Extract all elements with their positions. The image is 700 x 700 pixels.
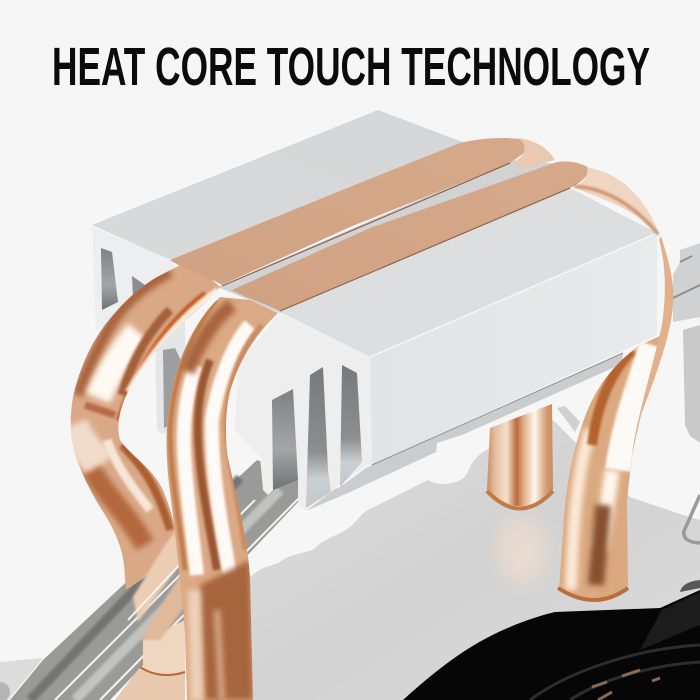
fan copper reflections [592,670,660,700]
rear pipe light edge [128,290,218,392]
front slot 3 [340,365,362,487]
rear pipe far bend [512,138,555,168]
rear fin slot 2 [132,276,145,298]
copper flat contacts [170,138,588,311]
far tube white reflection [618,345,652,470]
front pipe shoulder [188,305,232,372]
front flat contact [232,161,588,311]
rear pipe lower reflection [140,572,184,640]
rear fin slot 1 [101,248,118,310]
front lower fin strip [306,353,623,511]
rear pipe right dark [122,445,170,530]
far tube dark patch [596,505,603,585]
rear pipe clipped shading [72,272,218,545]
rear pipe dark stripe [122,310,170,395]
far tube highlight [571,430,590,590]
front heat sink [235,188,657,511]
rear pipe brown band [92,470,145,545]
stub collar [487,491,553,508]
rear pipe curve [71,260,220,590]
fan edge sheen [640,592,700,650]
far tube streak [592,350,632,445]
front pipe lower light [194,590,197,700]
rear pipe shoulder [78,272,170,395]
rear lower fin [155,320,185,434]
front pipe left edge [170,300,216,570]
front pipe lower mid light [217,610,222,700]
rear lower slot [163,348,183,428]
rear pipe main highlight [98,332,138,398]
fan [403,590,700,700]
far tube collar [558,588,628,600]
plate reflection under stub [496,516,548,584]
rear pipe orange streak [118,293,205,420]
far tube clipped shading [571,345,652,590]
front pipe clipped shading [170,300,262,700]
rear heat sink [92,110,570,434]
front pipe body [167,297,278,700]
fan shroud [403,590,700,700]
far bend top [575,167,660,237]
rear pipe reflection on rods [133,528,183,622]
rear copper stub [487,404,553,508]
front pipe inner edge [226,325,262,550]
rear copper foot [115,620,185,700]
fan hub rings [530,645,700,700]
rear end face [92,227,190,330]
rods, diagonal bracket [0,460,300,700]
rear pipe pale band [107,440,150,510]
gap between pipes [218,160,570,313]
front pipe left highlight [184,365,197,575]
rear flat contact [170,138,527,285]
front long face [370,233,657,465]
rear pipe pale waist [72,425,102,465]
far thin edge [632,236,673,455]
front heat pipe [167,297,278,700]
rear top face [92,110,465,260]
front end face [235,313,372,510]
front slot 2 [306,367,331,508]
front pipe lower speckle [200,560,253,700]
right clip and post [557,243,700,592]
rear pipe brown knot [85,405,115,415]
plate corner, lower left [0,658,43,700]
front heat pipe, far side [558,167,673,600]
far tube light [600,470,612,550]
far tube body [559,335,662,600]
rear heat pipe [71,260,220,640]
base plate [250,420,700,700]
front pipe right highlight [212,325,250,575]
front pipe dark core [198,360,217,570]
front slot 1 [272,389,298,490]
front top face [280,188,657,357]
